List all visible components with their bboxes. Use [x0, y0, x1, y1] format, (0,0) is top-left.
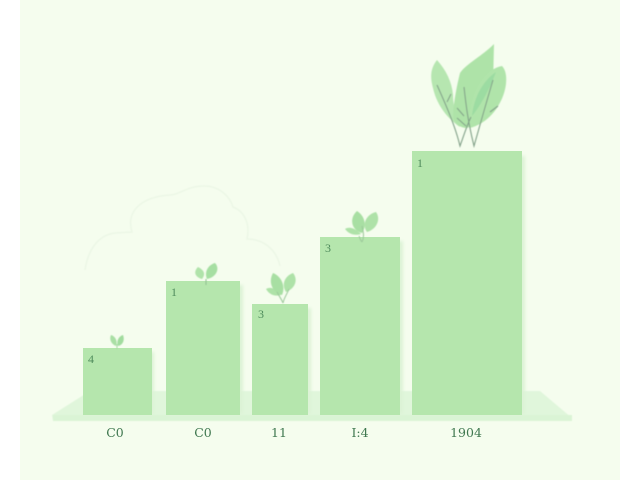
ground platform	[52, 391, 572, 421]
axis label: bar 3: 11	[271, 425, 287, 440]
bar 4	[320, 237, 400, 415]
axis label: bar 4: I:4	[351, 425, 369, 440]
bar 3	[252, 304, 308, 415]
value: bar 4: 3	[325, 241, 331, 255]
value: bar 3: 3	[258, 307, 264, 321]
bar 2	[166, 281, 240, 415]
icon: sprout on bar 1	[110, 335, 124, 349]
value: bar 1: 4	[88, 352, 94, 366]
value: bar 2: 1	[171, 285, 177, 299]
axis labels	[106, 425, 482, 440]
right leaf	[469, 66, 506, 128]
bar value labels	[88, 156, 423, 366]
bar chart	[83, 151, 525, 415]
value: bar 5: 1	[417, 156, 423, 170]
left leaf	[431, 60, 460, 127]
icon: sprout on bar 4	[345, 211, 378, 242]
leaf stems	[437, 80, 498, 146]
bar shadows	[87, 156, 525, 414]
icon: large leaves on bar 5	[431, 44, 506, 146]
icon: sprout on bar 3	[266, 273, 296, 303]
axis label: bar 5: 1904	[450, 425, 482, 440]
bar 5	[412, 151, 522, 415]
axis label: bar 1: C0	[106, 425, 124, 440]
leaf highlight	[472, 72, 496, 116]
cloud outline	[85, 186, 280, 270]
axis label: bar 2: C0	[194, 425, 212, 440]
centre leaf	[453, 44, 494, 128]
icon: sprout on bar 2	[195, 263, 217, 285]
bar 1	[83, 348, 152, 415]
